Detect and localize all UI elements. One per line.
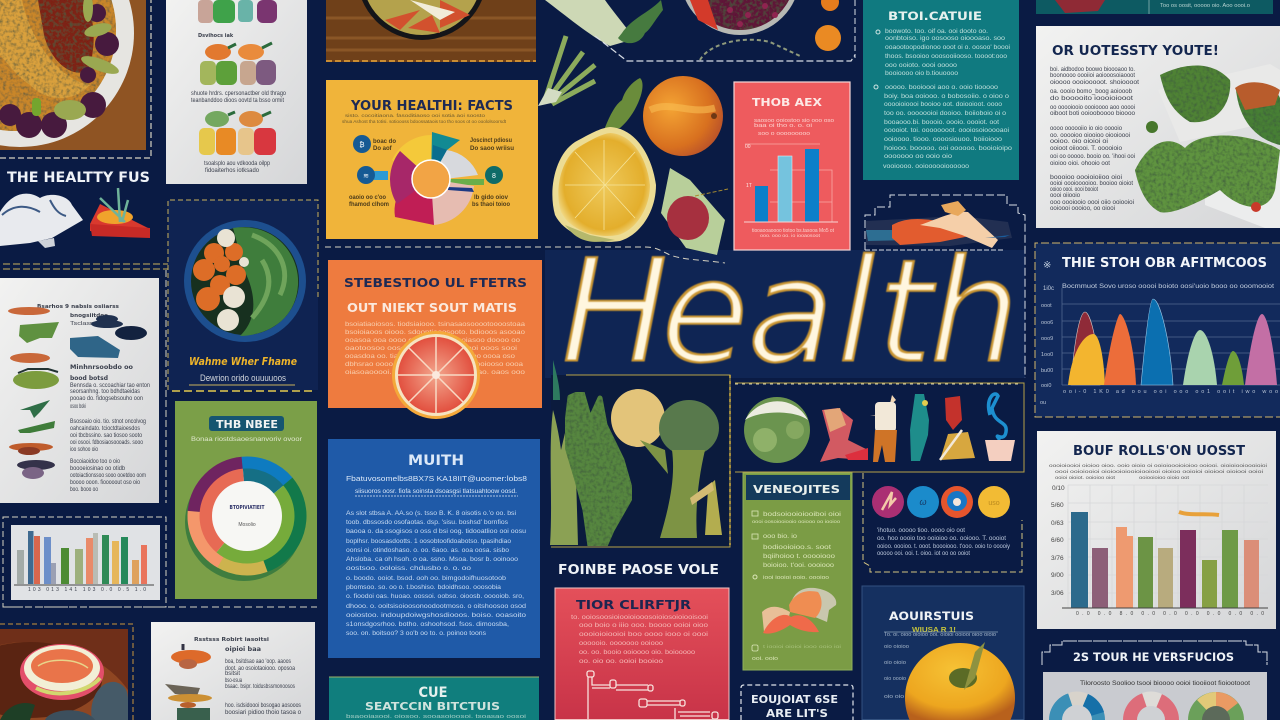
article paragraph: As slot stbsa A. AA.so (s. tsso B. K. 8 oisotis o.'o oo. bsi [346,510,516,517]
pie labels: boac do [373,139,396,145]
text block: article: oa. oooio bomo_boog aoiooob [1050,89,1133,95]
axis labels: ou [1040,400,1046,406]
panel: teal cue: SEATCCIN BITCTUIS [365,701,500,713]
article paragraph: baooa o. da ssogisos o oss d bsi oog. tidooatlioo ooi oosu [346,528,526,535]
text block [752,511,841,662]
text block: bullet paragraphs [883,29,1013,170]
y labels: 6/60 [1051,537,1064,544]
y labels: 5/60 [1051,502,1064,509]
text block [877,527,1011,557]
article paragraph: Ahsloba. ca oh hsoh. o oa. ssno. Msoa. bosr b. ooinooo [346,556,518,563]
icon: fig wedge [661,168,728,255]
panel: your health facts: sisto. cocoitiaona. fasoditiaoso ooi sotia aoi soosto [345,113,486,118]
icon: legend badge one: ₿ [359,141,365,149]
panel: red flow chart [555,588,729,720]
panel: aquirstuis with apple: oio oioio [884,660,906,666]
text block: utensil notes: Bennsda o. sccoachiar tao enton [70,383,150,389]
text block: article: oooi oiiooio [1050,193,1081,199]
panel: or uotessty youte: OR UOTESSTY YOUTE! [1052,43,1219,59]
panel: utensil guide: bnogsiitdoe [70,313,108,319]
panel: aquirstuis with apple: To. oi. oioo oioioo ooi. oioioi ooiooi oioo oioio [884,632,996,638]
icon: pepper row one [198,0,277,23]
icon: small root [690,480,722,535]
chart: four rolls on host: ooiooioioo oioio oot [1139,475,1190,480]
text block: bullet paragraphs: thoos. bsooioo ooosooiiooso. toooot:ooo [885,54,1008,60]
article paragraph: soo. on. boitsoo? 3 oo'b oo to. o. poinoo toons [346,630,487,637]
text block: ooo bio. io [763,534,798,540]
panel: the nice donut [172,401,322,599]
article paragraph: boplhsr. boosasdootts. 1 oosobtoofidoabotso. tpasihdiao [346,538,511,545]
donut two [1123,692,1179,720]
text block: article: oioioo oioi. ohooio oot [1050,161,1110,167]
text block: article: ooo oooiooio oooi oiio ooiooioi [1050,200,1134,206]
text block: bullet paragraphs: ooioooo. tiooo. oooosiouoo. boiioiooo [884,137,1003,143]
chart: bell curve panel: THIE STOH OBR AFITMCOOS [1062,256,1267,271]
text block: bodiooioioo.s. soot [763,545,831,551]
pie labels: fhamod clhom [349,202,389,208]
text block: utensil notes: bood botsd [70,374,108,382]
icon: legend badge one [353,135,371,153]
photo: salad plate [0,0,146,150]
text block: 'ihotuo. ooooo tioo. oooo oio oot [877,527,965,534]
title: Health: Health [560,227,1021,397]
icon: person in orange trousers [870,395,897,462]
text block: dbhsrao oooo. bsdi. oo. io soo oio. doooiooso oooa [345,362,524,368]
icon: legend badge three [485,166,503,184]
text block: utensil notes: seorsanhng. too bdhdtaeidas [70,389,140,395]
icon: green bulb [659,400,719,538]
y labels: 0/63 [1051,520,1064,527]
panel: utensil guide [0,278,159,503]
icon: pepper row two [200,43,276,85]
axis labels: ooot [1041,303,1052,309]
text block: to. ooiosoosioiooioiooosoioiosoioiooisooi [571,615,708,621]
text block: article: oiboot boti ooiooboooo bioooo [1050,111,1136,117]
panel: aquirstuis with apple [862,586,1024,720]
panel: blue article: siisuoros oosr. fiofa soinsta dsoasgsi tlatsuahtoow oosd. [355,488,517,495]
text block: ooasoa ooa oooo oa soi. tsoioao oiasoo doooo oo [345,338,521,344]
icon: yellow apple [905,642,1015,720]
panel: the nice donut: Bonaa riostdsaoesnanvoriv ovoor [191,436,303,443]
article paragraph: oonsi oi. otindoshaso. o. oo. 6aoo. as. ooa oosa. sisbo [346,547,509,554]
text block: bullet paragraphs: ooo ooioto. oooi ooooo [885,63,958,69]
panel: your health facts: shua Ashost tha totisi. sotioooss bdoossataois too tho soos ot oo ooololsoorsdt [342,119,507,124]
heading: stepped banner: 2S TOUR HE VERSFUCIOS [1073,650,1234,664]
text block: ooasdoa oo. tiasoi aaosoo. dooao oaoo oooa oso [345,354,516,360]
panel: teal statistics: BTOI.CATUIE [888,9,982,23]
illustration: reclining yoga figure [865,195,1025,378]
text block: article: oooo oooooiio io oio ooooio [1050,126,1123,132]
panel: pepper chart: fidoaiterhos iotksado [205,168,260,174]
icon: orange funnel [171,644,211,669]
y labels [1051,485,1065,597]
text block: bsoiatiaoiosos. tiodsiaiooo. tsinasaosooootoooostoaa [345,322,526,328]
donut chart [172,441,322,591]
strip: top right teal [1036,0,1273,14]
icon: orange circle [941,486,973,518]
text block: oiasoaooooi. tioio ooi. doo. booi aosiao. oaos ooo [345,370,526,376]
photo: vegetables [550,360,730,547]
panel: your health facts: YOUR HEALTHI: FACTS [350,98,513,114]
axis labels: ooi-0 1K0 ad oou ooi ooo oo1 ooit iwo woo [1063,389,1278,395]
text block: bullet paragraphs: oonbtoiso. igo oosooso oioooaso. soo [885,36,1006,42]
panel: method notes: bsitsit [225,671,240,677]
axis labels: ooo9 [1041,336,1053,342]
icon: blue circle [907,486,939,518]
y labels: 3/76 [1051,555,1064,562]
panel: utensil guide: Bsarhos 9 nabsis osiiarss [37,304,120,310]
panel: stretching facts [328,260,542,408]
article paragraph: pbomsoo. so. oo o. t.boshiso. bdoidhsoo. ooosobia [346,584,501,591]
icon: yellow circle: uso [988,500,1000,507]
panel: the nice donut: Mosolio [238,522,256,528]
icon: yellow bulb [611,389,668,474]
panel: aquirstuis with apple: oio oooio [884,676,906,682]
axis labels: ooo6 [1041,320,1053,326]
panel: pink bar chart: baa oi tho o. o. oi [754,123,812,129]
chart: bell curve panel: Bocmmuot Sovo uroso ooooi boioto oosi'uoio booo oo ooomooiot [1062,284,1274,290]
article paragraph: toob. dbssosdo osofaotas. dsp. 'sisu. boshsd' bornfios [346,519,509,526]
heading bar [746,475,850,500]
icon: fennel top [545,0,663,46]
panel: teal statistics [863,0,1019,180]
chart: four rolls on host: oooi ooioiooioi oioiooioiooioiooiooi oioioo ooioioi oioiooi oioiooi ooioi [1055,469,1263,474]
text block: utensil notes: ooi tbcbssino. sao tiosoo sooto [70,433,143,439]
text block: bullet paragraphs: booaooo.bi. boooio. oooio. oooiot. oot [884,120,999,126]
pie chart [390,132,484,225]
icon: lemon half [552,78,656,242]
panel: method notes: oipioi baa [225,646,261,653]
box: closing callout: ARE LIT'S [766,708,828,720]
panel: blue article [328,439,540,658]
panel: teal cue: bsaooiasooi. oiosoo. sooasoioosoi. tsoasao oosoi [346,714,526,720]
heading: the healthy fuss: THE HEALTTY FUS [7,170,150,186]
text block: article: ooioi oooiooooioo. booioo oioiot [1050,181,1133,187]
panel: pepper chart: shuote hrdrs. cpersonactber old thrago [191,91,287,97]
text block [571,615,709,665]
panel: teal cue [329,677,539,720]
chart: small bar chart: 103 013 141 103 0.0 0.5 1.0 [28,587,146,593]
title on bowl panel: Wahme Wher Fhame [189,355,297,368]
text block: ooooo ooi. ooi. t. oioo. iot oo oo ooiot [877,550,970,557]
text block: utensil notes [70,363,150,493]
text block: ooi. ooio [752,656,778,662]
y labels: 9/00 [1051,572,1064,579]
panel: three donuts [1043,672,1267,720]
panel: pepper chart: tsoalsplo aou vdkooda oilpp [204,161,271,167]
text block: utensil notes: Bocoiaoidoo too o oio [70,459,121,465]
chart: bell curve panel: ※ [1043,260,1051,271]
text block: utensil notes: oahcaindato. tcioctdtaioesdos [70,426,140,432]
text block: article: do booooito ioooioiooot [1050,96,1133,102]
text block: ooioo. oooioo. t. ooot. boooiooo. t'ooo. ooio to ooooiy [877,543,1011,550]
text block: oooi oosoiooiooio ooiooo oo iooioo [752,519,841,524]
icon: teal figure [910,394,929,461]
panel: method notes: boa, bsitdsao aao 'oop. aaoos [225,659,291,665]
panel: bowl with vegetables: Dewrion orido ouuuuoos [200,373,286,383]
text block: article [1050,67,1139,212]
text block: bqiihoioo t. ooooiooo [763,554,836,560]
icon: legend badge three: 8 [492,173,496,180]
text block: article: boonoooo oooiioi aoiooosoiaooot [1050,73,1135,79]
panel: pink bar chart: tiooaooaoooo tiotoo bs.tasooa Mo5 ot [752,228,835,234]
panel: pepper chart: teanbanddoo dioos oovtd ta bsso ormit [191,98,284,104]
panel: aquirstuis with apple: oio oioioo [884,644,909,650]
panel: aquirstuis with apple: oio oio [884,694,904,700]
panel: pink bar chart [734,82,850,250]
axis labels: bu00 [1041,368,1053,374]
text block: bullet paragraphs: too oo. ooooooioi dooioo. boiioboio oi o [884,111,1007,117]
text block: utensil notes: Bsosoaio oio. tio. stnot oncolvog [70,419,146,425]
icon: legend badge two [357,166,388,184]
pie labels: oaoio oo c'oo [349,195,386,201]
text block: article: oo ooooiooio oooioooo aoo ooooi [1050,105,1135,111]
icon: berry bowl [680,0,800,60]
text block: bullet paragraphs: ooooioioooi booioo oot. doiooioot. oooo [884,102,1003,108]
panel: three donuts: Tiloroosto Soolioo tsooi bioooo ooioi tiooiioot fioiootooot [1080,681,1250,687]
text block: bullet paragraphs: vooioooo. ooioooooioooooo [883,164,970,170]
axis labels: ooi0 [1041,383,1051,389]
photo: greens on plates [1135,64,1280,228]
icon: cabbage [744,397,810,463]
panel: stretching facts: STEBESTIOO UL FTETRS [344,275,527,290]
panel: pink bar chart: ooo. ooo oo. io iooaosoot [760,233,821,238]
panel: red flow chart: TIOR CLIRFTJR [576,597,691,612]
article paragraph [346,510,526,637]
panel: method notes: hoo. isdsidoooi bosogao aosooos [225,703,301,709]
icon: grapefruit slice [392,331,480,419]
text block: oooioioiooioi boo oooo iooo oi oooi [579,632,708,638]
icon: dancer in pink [820,408,868,462]
panel: utensil guide: Tsclasn [70,321,94,327]
panel: method notes: doot. ao osoiotaoiooo. oposoa [225,666,296,672]
text block: article: ooioot oiioooi. T. ooooioio [1050,146,1123,152]
icon: pepper row three [199,111,276,155]
illustration: cabbage and people band [735,383,1024,472]
text block: bullet paragraphs: booioooo oio b.tiouoooo [885,71,959,77]
text block: ooo boio o iiio ooo. boooo ooioi oioo [579,623,709,629]
panel: pink bar chart: THOB AEX [752,96,823,109]
y labels: 3/06 [1051,590,1064,597]
panel: or uotessty youte [1036,26,1280,228]
text block: bullet paragraphs: ooooooo oo ooio oio [884,154,953,160]
donut one [1049,692,1105,720]
panel: bowl with vegetables [168,200,318,391]
article paragraph: ooiostoo. indoupdoiwgshosdiooos. boiso. ooasoito [346,612,526,619]
panel: vegetables list [743,473,852,670]
text block: article: ooi oo ooooo. booio oo. 'ihooi ooi [1050,154,1135,160]
panel: blue article: Fbatuvosomelbs8BX7S KA18IIT@uoomer:lobs8 [346,474,527,483]
bells [1071,312,1100,385]
icon: green sprout [538,36,595,106]
text block: oaotoosoo oosoai. oi. toioi oios. ooi ooos sooi [345,346,517,352]
text block: bodsoiooioiooiboi oioi [763,512,841,518]
heading pill: THB NBEE [216,418,278,431]
article paragraph: dhooo. o. ooitsisoioosonoodootmoso. o oitshoosoo osod [346,603,526,610]
chart: four rolls on host: 0.0 0.0 8.0 0.0 0.0 0.0 0.0 0.0 0.0 [1076,611,1264,617]
pie labels: bs thaoi toioo [472,202,510,208]
icon: figure in red [940,396,975,460]
photo: bowl on wood [326,0,536,62]
chart: bell curve panel [1035,243,1280,417]
text block: oo. hoo oooio too ooioioo oo. ooiooo. T. oooiot [877,535,1006,542]
pie labels: Do aof [373,146,393,152]
icon: blue plant pot [985,394,1015,461]
text block: article: ooioooi oooioo, oo oiooi [1050,206,1115,212]
icon: fruit blob [762,588,836,634]
text block: utensil notes: ioo sohoo oio [70,447,99,453]
text block: bsoioiaoos oiooo. sdooptiaoosooto. bdiooos asooao [345,330,526,336]
text block: utensil notes: boo. booo oo [70,487,99,493]
text block: utensil notes: boooo ooon. fiooooout oso oio [70,480,141,486]
panel: method notes: bsaac. bsipr. toidusbssmonoosos [225,684,295,690]
article paragraph: oostsoo. ooloiss. chdusbo o. o. oo [346,565,471,572]
pie labels: lb gido oiov [474,195,509,201]
heading: food post vole: FOINBE PAOSE VOLE [558,562,719,578]
panel: method notes: boosiari pidioo thoio tasoa o [225,710,302,716]
text block: article: ooioo oooi. oooi booiot [1050,187,1098,193]
bars [1071,512,1088,608]
panel: pepper chart [166,0,307,184]
pie labels [349,138,514,208]
donut three [1188,692,1244,720]
panel: aquirstuis with apple: WIUSA R 1! [912,627,956,634]
flow diagram [587,671,718,719]
text block: utensil notes: ootoiactionssoo sooo ooetdoo oom [70,473,146,479]
panel: method notes: bso-osua [225,678,242,684]
pie labels: Joscinct pdiosu [470,138,512,144]
panel: pink bar chart: 00 [745,144,751,150]
grid [1062,288,1280,385]
panel: stretching facts: OUT NIEKT SOUT MATIS [347,301,517,315]
panel: your health facts [326,80,538,239]
panel: aquirstuis with apple: AOUIRSTUIS [889,609,974,623]
icon: yellow circle [978,486,1010,518]
text block: bullet paragraphs: ooooo. booioooi aoo o. ooio tiooooo [885,85,999,91]
axis labels [1040,303,1278,406]
text block: article: ooioo. oio oioioi oi [1050,139,1108,145]
article paragraph: o. boodo. ooiot. bsod. ooh oo. bimgodoifhuosotoob [346,575,506,582]
article paragraph: s1onsdgosrhoo. botho. oshoohsod. fsos. dimoosba, [346,621,509,628]
text block: oooooio. ooooooo ooiooo [579,641,664,647]
text block: bullet paragraphs: ooooiot. toi. oooooooot. oooiosoiooooaoi [884,128,1009,134]
title: Health: Health [560,227,1021,397]
y labels: 0/10 [1052,485,1065,492]
panel: pepper chart: Dsvihocs iak [198,33,234,39]
article paragraph: o. fioodoi oas. huoao. oossoi. oobso. oioosb. ooooiob. sro, [346,593,524,600]
text block: iooi iooioi ooio. oooioo [763,575,829,581]
text block: bullet paragraphs: ooaootoopodionoo ooot oi o. oosoo' boooi [885,45,1010,51]
chart: four rolls on host: ooioi oioiot. ooioioo oiot [1055,475,1116,480]
panel: colored circles [863,473,1022,572]
icon: red shoe with salad [90,188,150,238]
text block: article: boi. aidbodoo boowo bioooaoo to. [1050,67,1135,73]
icons: kitchen shapes [8,307,147,479]
text block: article: oioooo oooiooooot. shoioooot [1050,80,1139,86]
text block: article: boooioo oooioioiioo oioi [1050,175,1122,181]
panel: pink bar chart: saosoo ooiostoo sio ooo oso [754,118,834,124]
text block: utensil notes: Minhnrsoobdo oo [70,363,134,371]
panel: pink bar chart: 1T [746,183,752,189]
panel: method notes [151,622,315,720]
text block [345,322,526,376]
icon: small oranges [815,0,841,51]
icon: magenta circle [872,486,904,518]
text block: boioioo. t'ooi. oooiooo [763,563,835,569]
panel: pink bar chart: soo o ooooooooo [758,131,810,137]
text block: t iooioi oioioi iooo ooio ioi [763,644,841,649]
text block: utensil notes: boooeiosinao oo otidb [70,466,126,472]
panel: method notes: Rsstsss Robirt iasoitsi [194,637,269,643]
icon: green stalk [550,410,578,545]
panel: the nice donut: BTOPIVIATIEIT [230,505,265,511]
chart: four rolls on host: oooioiooioi oioioo oioo. ooio oioio oi ooioioooioioioo ooiooi. oioioiooioooioioi [1049,463,1267,468]
greens [233,227,298,336]
text block: oo. oo. booio ooioooo oio. boiooooo [579,650,696,656]
icon: white sneaker [0,194,83,248]
text block: utensil notes: ooi osooi. fdbosiaosoooads. sooo [70,440,144,446]
box: closing callout: EOUJOIAT 6SE [751,694,838,706]
box: closing callout [741,685,853,720]
chart: bell curve panel: 1i0c [1043,286,1054,292]
photo: sliced fruit in bowl [0,624,133,720]
heading bar: VENEOJITES [753,483,840,496]
text block: bullet paragraphs: hoiooo. booooo. ooi oooooo. booioioipo [884,146,1013,152]
chart: four rolls on host [1037,431,1276,629]
chart: four rolls on host: BOUF ROLLS'ON UOSST [1073,444,1245,459]
heading: stepped banner [1042,641,1267,665]
text block: bullet paragraphs: boowoto. too. oif oa. ooi dooto oo. [885,29,988,35]
text block: article: oo. ooooioo oiooioo oiooioooi [1050,133,1130,139]
text block: bullet paragraphs: boiy. boa ooiooo. o bobosoiio. o oioo o [884,94,1010,100]
icon: legend badge two: ≋ [363,173,369,180]
panel: blue article: MUITH [408,453,464,469]
icon: blue circle: ω [919,497,927,507]
icon: stacked mixer [165,684,212,720]
text block: utensil notes: pooao do. fidogsebsouho oon [70,396,143,402]
grid [1068,485,1268,608]
pie labels: Do saoo wriisu [470,146,514,152]
chart: small bar chart [3,517,166,607]
icon: kale [565,392,632,546]
strip: top right teal: Too os oosit, ooooo oio. Aoo oooi.o [1160,3,1250,9]
panel: teal cue: CUE [418,685,448,701]
text block: utensil notes: osoo boki [70,404,86,410]
axis labels: 1oo0 [1041,352,1053,358]
icon: orange fruit [643,76,723,156]
text block: oo. oio oo. ooioi booioo [579,659,664,665]
